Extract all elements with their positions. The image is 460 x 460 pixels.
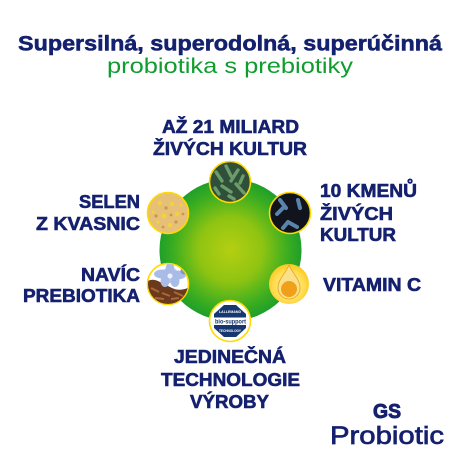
label: ten strains: ŽIVÝCH xyxy=(320,203,393,224)
label: ten strains xyxy=(320,179,417,245)
label: vitamin C: VITAMIN C xyxy=(323,274,421,295)
heading: main title: Supersilná, superodolná, superúčinná xyxy=(18,32,442,56)
central green circle xyxy=(160,179,302,321)
logo: GS Probiotic: Probiotic xyxy=(330,422,444,450)
logo: GS Probiotic: GS xyxy=(373,401,401,423)
icon: selenium yeast photo xyxy=(148,192,188,234)
title xyxy=(18,32,442,78)
icon: chicory prebiotic photo xyxy=(146,262,190,307)
label: selenium: Z KVASNIC xyxy=(36,213,140,234)
icon: live cultures photo xyxy=(210,162,250,202)
label: technology xyxy=(161,346,300,412)
label: prebiotics xyxy=(23,264,140,306)
icon: ten strains photo xyxy=(270,192,310,234)
icon: bio-support badge: TECHNOLOGY xyxy=(219,329,242,333)
label: ten strains: KULTUR xyxy=(320,224,396,245)
label: ten strains: 10 KMENŮ xyxy=(320,179,417,201)
label: selenium: SELEN xyxy=(79,191,140,212)
icon: vitamin C drop xyxy=(269,264,309,304)
label: prebiotics: NAVÍC xyxy=(81,264,140,285)
label: selenium xyxy=(36,191,140,234)
label: prebiotics: PREBIOTIKA xyxy=(23,285,140,306)
label: technology: VÝROBY xyxy=(190,391,270,412)
heading: subtitle: probiotika s prebiotiky xyxy=(107,55,354,78)
icon: bio-support badge xyxy=(210,300,250,342)
logo: GS Probiotic xyxy=(330,401,444,450)
label: live cultures: ŽIVÝCH KULTUR xyxy=(153,138,307,159)
label: live cultures xyxy=(153,116,307,159)
icon: bio-support badge: bio-support xyxy=(215,320,246,326)
label: technology: TECHNOLOGIE xyxy=(161,369,300,390)
label: live cultures: AŽ 21 MILIARD xyxy=(162,116,299,137)
label: technology: JEDINEČNÁ xyxy=(174,346,286,367)
icon: bio-support badge: LALLEMAND xyxy=(219,310,241,314)
